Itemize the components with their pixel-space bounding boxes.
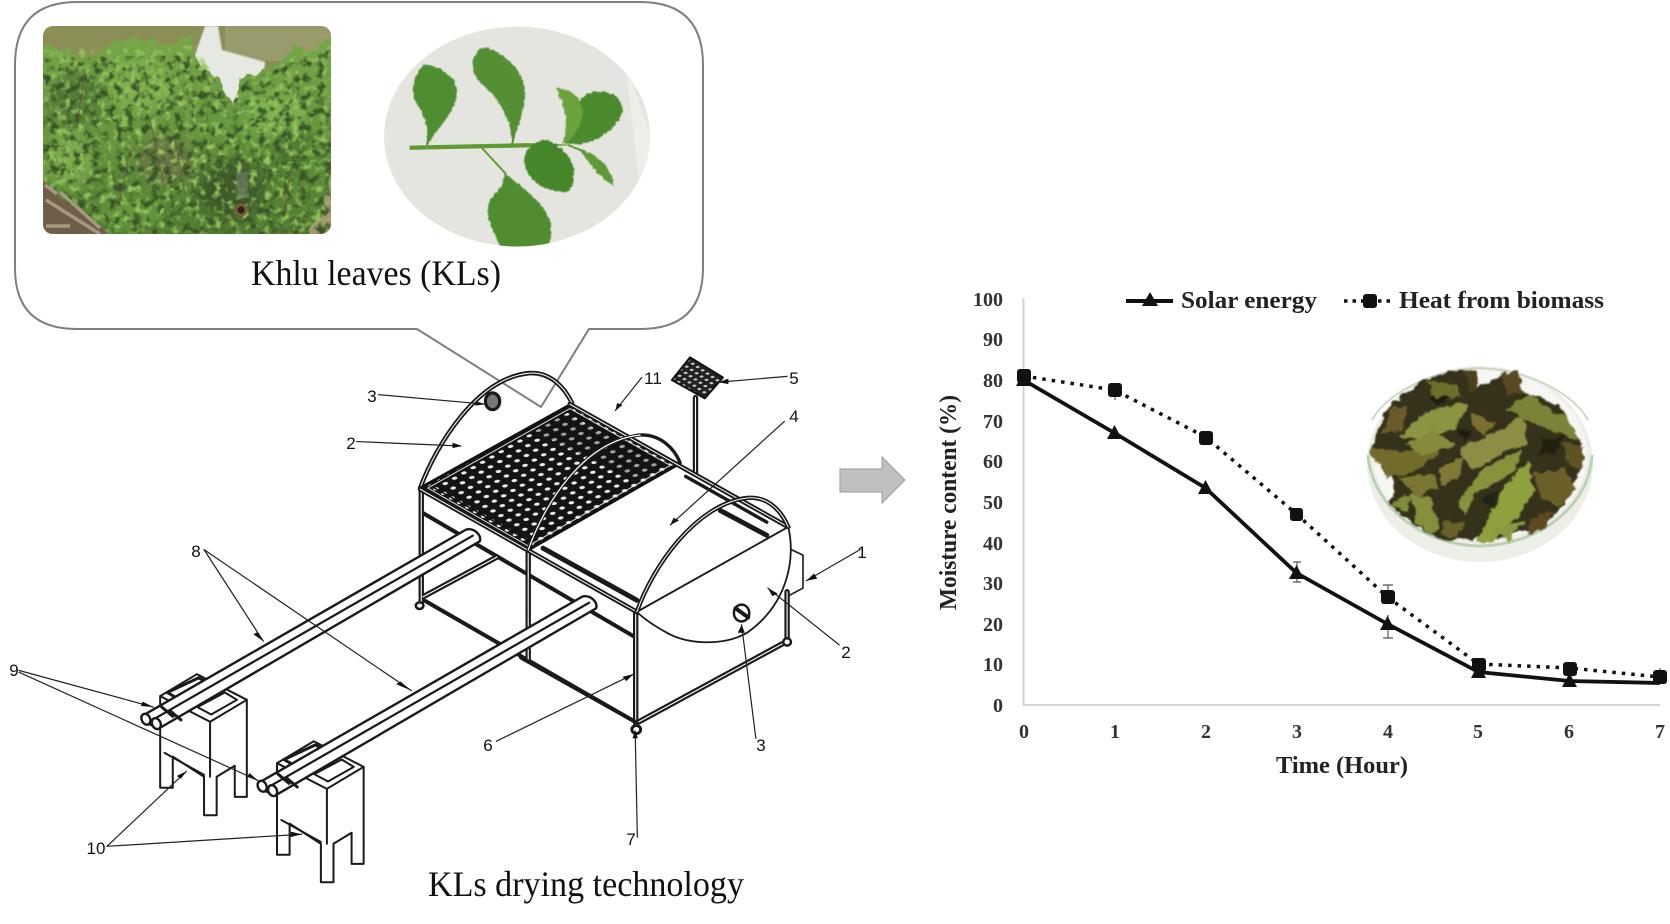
arrow: process flow (840, 457, 905, 503)
part number labels: 7 (626, 830, 636, 849)
error bars (1115, 394, 1660, 675)
y axis tick labels: 20 (983, 614, 1003, 636)
line chart: moisture content vs time (936, 288, 1667, 779)
part number labels: 6 (483, 736, 493, 755)
rear end cap arc (420, 373, 572, 488)
y axis title: Moisture content (%) (936, 395, 962, 610)
gauge rear (485, 393, 500, 410)
pipes right (256, 596, 596, 797)
bush stems (78, 70, 290, 215)
part number labels: 8 (191, 542, 201, 561)
photo: dried khlu leaves in dish (1367, 366, 1593, 562)
mesh drying tray (420, 405, 677, 550)
pipes left (140, 529, 480, 730)
x axis tick labels: 5 (1473, 721, 1483, 743)
callout: Khlu leaves (15, 2, 703, 407)
part number labels: 1 (857, 543, 867, 562)
x axis tick labels (1019, 721, 1665, 743)
frame legs and bottom rails (421, 398, 787, 724)
part number labels: 4 (789, 407, 799, 426)
legend (1126, 288, 1604, 314)
x axis tick labels: 0 (1019, 721, 1029, 743)
y axis tick labels: 30 (983, 573, 1003, 595)
y axis tick labels: 50 (983, 492, 1003, 514)
x axis tick labels: 7 (1655, 721, 1665, 743)
middle arc (528, 435, 680, 550)
part number labels: 3 (367, 387, 377, 406)
leader lines (19, 376, 860, 846)
stand left (160, 674, 247, 815)
y axis tick labels: 60 (983, 451, 1003, 473)
casters (416, 602, 423, 609)
part number labels: 9 (9, 661, 19, 680)
part number labels (9, 369, 867, 858)
x axis title: Time (Hour) (1276, 753, 1408, 779)
x axis tick labels: 2 (1201, 721, 1211, 743)
callout bubble outline (15, 2, 703, 407)
caption: Khlu leaves (KLs): Khlu leaves (KLs) (251, 253, 501, 293)
legend: Heat from biomass (1399, 288, 1604, 314)
machine linework (19, 357, 860, 882)
exhaust box (790, 550, 803, 595)
leader arrowheads (141, 379, 817, 837)
x axis tick labels: 1 (1110, 721, 1120, 743)
y axis tick labels: 80 (983, 370, 1003, 392)
y axis tick labels: 0 (993, 695, 1003, 717)
y axis tick labels: 100 (973, 289, 1003, 311)
solar panel (672, 357, 723, 398)
y axis tick labels (973, 289, 1003, 717)
clear top panel (528, 465, 788, 612)
y axis tick labels: 40 (983, 533, 1003, 555)
caption: KLs drying technology: KLs drying technology (428, 864, 744, 904)
part number labels: 11 (644, 369, 662, 388)
x axis tick labels: 4 (1383, 721, 1393, 743)
series: solar energy (1016, 372, 1660, 687)
y axis tick labels: 70 (983, 411, 1003, 433)
top rails (420, 404, 788, 612)
part number labels: 10 (87, 839, 105, 858)
axes (1024, 298, 1660, 705)
x axis tick labels: 3 (1292, 721, 1302, 743)
part number labels: 2 (841, 643, 851, 662)
stand right (277, 741, 364, 882)
series: heat from biomass (1017, 369, 1667, 684)
photo: khlu bush (43, 26, 338, 240)
diagram: KLs drying machine (9, 357, 867, 904)
front end cap (637, 527, 791, 642)
legend: Solar energy (1181, 288, 1317, 314)
y axis tick labels: 10 (983, 654, 1003, 676)
x axis tick labels: 6 (1564, 721, 1574, 743)
part number labels: 5 (789, 369, 799, 388)
gauge front (734, 605, 749, 621)
part number labels: 2 (346, 434, 356, 453)
y axis tick labels: 90 (983, 329, 1003, 351)
part number labels: 3 (756, 736, 766, 755)
photo: khlu leaf sprig (384, 26, 655, 250)
